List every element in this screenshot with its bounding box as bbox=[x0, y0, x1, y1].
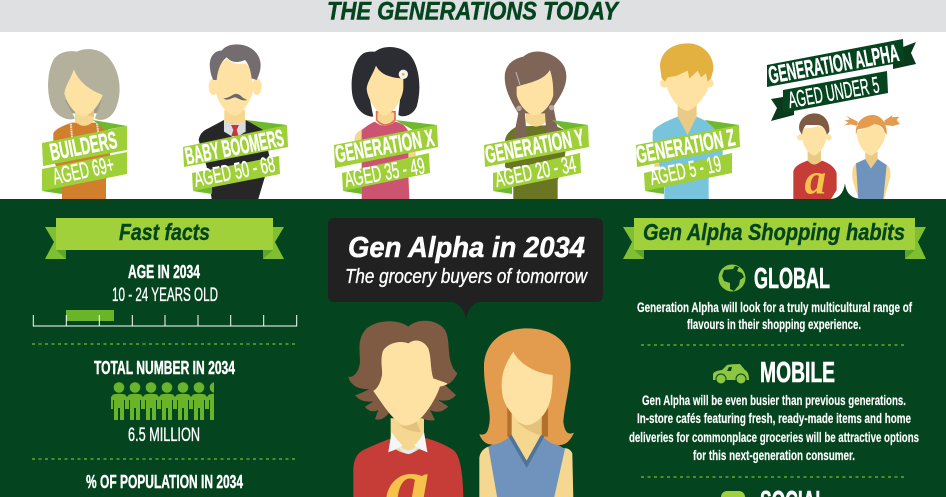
stat: age in 2034: 10 - 24 YEARS OLD bbox=[112, 284, 218, 306]
figure: generation y bbox=[483, 52, 589, 199]
figure: builders: BUILDERS bbox=[48, 127, 120, 166]
habit: global: flavours in their shopping experience. bbox=[687, 317, 861, 332]
stat: total number in 2034: TOTAL NUMBER IN 2034 bbox=[94, 358, 235, 378]
icon: car bbox=[713, 364, 749, 384]
figure: generation alpha children bbox=[766, 39, 916, 203]
illustration: girl bbox=[479, 328, 574, 497]
speech bubble bbox=[328, 218, 603, 320]
figure: baby boomers: AGED 50 - 68 bbox=[192, 151, 277, 192]
figure: generation z bbox=[634, 43, 740, 199]
figure: builders: AGED 69+ bbox=[50, 151, 116, 189]
figure: baby boomers bbox=[183, 44, 288, 199]
figure: baby boomers: BABY BOOMERS bbox=[183, 125, 286, 170]
habit: mobile bbox=[629, 357, 919, 463]
illustration: boy bbox=[348, 321, 463, 497]
stat: age in 2034: AGE IN 2034 bbox=[128, 262, 200, 282]
age range ruler bbox=[33, 310, 297, 326]
speech bubble: The grocery buyers of tomorrow bbox=[345, 266, 588, 288]
figure: generation y: AGED 20 - 34 bbox=[493, 151, 578, 192]
habit: global bbox=[637, 263, 912, 332]
figure: generation z: AGED 5 - 19 bbox=[648, 150, 723, 190]
icon: globe bbox=[718, 264, 746, 292]
white band bbox=[0, 32, 946, 199]
figure: generation x: GENERATION X bbox=[333, 125, 436, 169]
figure: generation x bbox=[333, 47, 438, 199]
habit: global: GLOBAL bbox=[754, 263, 830, 295]
habit: social bbox=[721, 486, 826, 497]
ribbon: fast facts heading bbox=[45, 218, 284, 259]
habit: mobile: for this next-generation consumer. bbox=[693, 448, 855, 463]
dark green panel bbox=[0, 199, 946, 497]
figure: generation z: GENERATION Z bbox=[634, 124, 737, 169]
stat: age in 2034 bbox=[33, 262, 297, 326]
icon: speech bubble bbox=[721, 491, 745, 497]
speech bubble: Gen Alpha in 2034 bbox=[348, 232, 585, 264]
figure: generation y: GENERATION Y bbox=[483, 124, 586, 169]
ribbon: fast facts heading: Fast facts bbox=[119, 219, 210, 245]
ribbon: shopping habits heading bbox=[623, 218, 926, 259]
stat: total number in 2034 bbox=[94, 358, 235, 446]
stat: percent of population: % OF POPULATION IN 2034 bbox=[86, 472, 243, 492]
people pictogram bbox=[111, 382, 223, 420]
habit: mobile: MOBILE bbox=[760, 357, 835, 389]
panel: fast facts bbox=[32, 218, 298, 492]
ribbon: shopping habits heading: Gen Alpha Shopping habits bbox=[643, 219, 905, 245]
title bar bbox=[0, 0, 946, 32]
figure: generation x: AGED 35 - 49 bbox=[342, 152, 427, 192]
figure: builders bbox=[42, 49, 127, 199]
panel: gen alpha in 2034 bbox=[328, 218, 603, 497]
panel: gen alpha shopping habits bbox=[623, 218, 926, 497]
stat: total number in 2034: 6.5 MILLION bbox=[128, 424, 200, 446]
figure: generation alpha children: a bbox=[804, 155, 826, 203]
